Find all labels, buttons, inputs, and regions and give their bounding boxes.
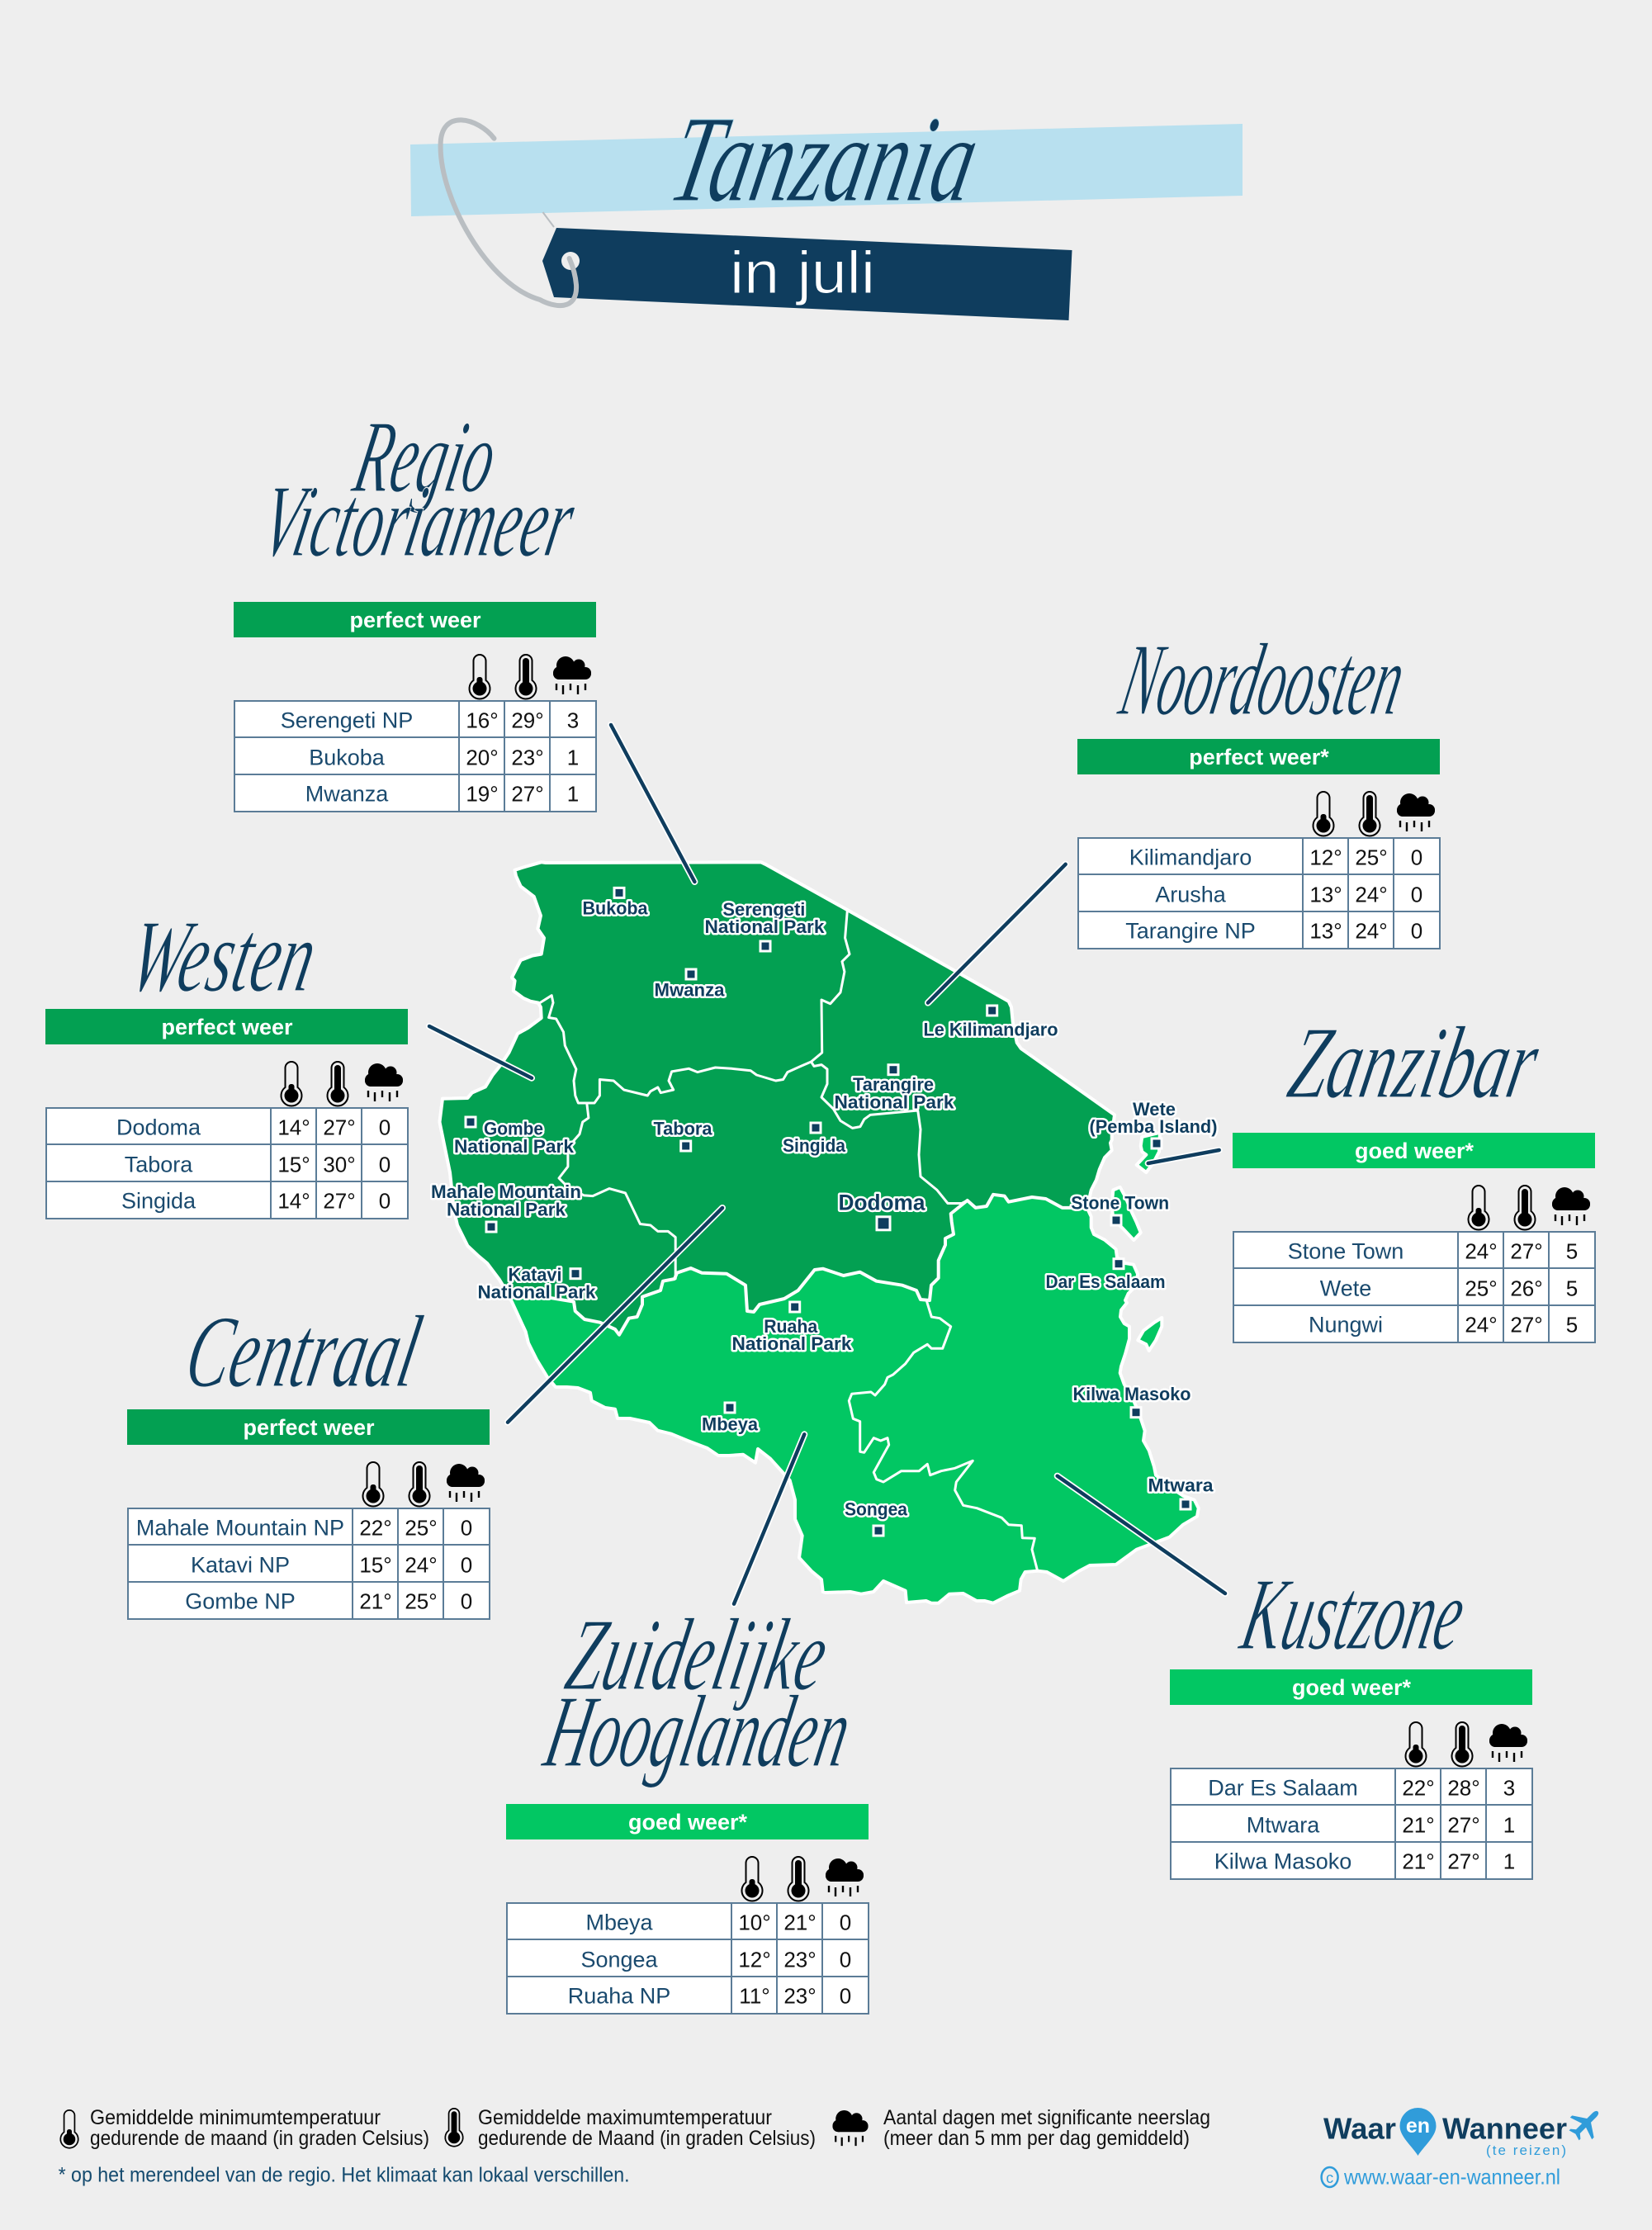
- table values: Singida: [121, 1189, 196, 1214]
- table values: 0: [461, 1589, 472, 1614]
- table values: Mahale Mountain NP: [136, 1516, 344, 1541]
- table values: 27°: [323, 1189, 356, 1214]
- table values: 24°: [1355, 883, 1388, 907]
- table values: 27°: [1447, 1813, 1480, 1838]
- place: Mahale Mountain National Park: Mahale Mountain: [431, 1181, 581, 1202]
- table values: 21°: [359, 1589, 392, 1614]
- place: Mwanza: Mwanza: [654, 979, 725, 1000]
- heading: Zuidelijke Hooglanden: [535, 1598, 861, 1789]
- table values: Stone Town: [1288, 1239, 1403, 1264]
- pointer lines from regions to panels: [429, 725, 1225, 1604]
- heading: Regio Victoriameer: [253, 400, 585, 579]
- subtitle: in juli: in juli: [730, 240, 875, 306]
- place: Ruaha National Park: National Park: [731, 1333, 852, 1354]
- heading: Regio Victoriameer: Regio: [345, 400, 507, 514]
- column icons: [1468, 1186, 1590, 1230]
- pointer: Regio Victoriameer: [611, 725, 694, 882]
- island: Zanzibar: [1112, 1187, 1141, 1240]
- place: Katavi National Park: Katavi: [509, 1265, 561, 1285]
- table values: 13°: [1309, 919, 1342, 944]
- table values: [568, 1910, 851, 2009]
- table values: Gombe NP: [185, 1589, 296, 1614]
- table values: Dar Es Salaam: [1208, 1776, 1358, 1801]
- table values: 12°: [738, 1948, 771, 1972]
- table values: 0: [840, 1948, 851, 1972]
- logo pin: [1400, 2108, 1437, 2156]
- table values: 28°: [1447, 1776, 1480, 1801]
- place: Gombe National Park: National Park: [454, 1136, 575, 1157]
- mainland: northern and central regions: [439, 862, 1115, 1335]
- rating banner: goed weer*: [1292, 1675, 1412, 1700]
- place: Bukoba: [583, 888, 648, 918]
- table values: 21°: [1402, 1849, 1435, 1874]
- place: Serengeti National Park: National Park: [705, 916, 825, 937]
- place: Stone Town: [1071, 1193, 1169, 1225]
- table grid: [1078, 838, 1440, 949]
- table values: 0: [379, 1153, 391, 1177]
- pointer: Centraal: [508, 1208, 722, 1423]
- place: Tarangire National Park: National Park: [834, 1091, 954, 1113]
- island: Pemba: [1137, 1133, 1160, 1172]
- column icons: [741, 1857, 864, 1901]
- table values: 21°: [1402, 1813, 1435, 1838]
- table values: 0: [461, 1516, 472, 1541]
- table values: 16°: [466, 708, 499, 733]
- rating banner: [1077, 739, 1440, 774]
- place: Stone Town: Stone Town: [1071, 1193, 1169, 1214]
- place: Tarangire National Park: [834, 1065, 954, 1113]
- rating banner: perfect weer: [161, 1015, 293, 1039]
- table values: Wete: [1320, 1276, 1371, 1301]
- table values: 24°: [1355, 919, 1388, 944]
- table values: 5: [1566, 1239, 1578, 1264]
- table values: 13°: [1309, 883, 1342, 907]
- place: Mwanza: [654, 969, 725, 1000]
- weather table: Regio Victoriameer: [234, 602, 596, 812]
- legend text: rain days: Aantal dagen met significante neerslag: [883, 2106, 1210, 2129]
- pointer: Kustzone: [1058, 1476, 1225, 1593]
- table values: 25°: [1465, 1276, 1498, 1301]
- table values: 27°: [1510, 1239, 1543, 1264]
- table values: Mwanza: [305, 782, 389, 807]
- legend icon: minimum temperature: [60, 2110, 78, 2148]
- table values: Serengeti NP: [281, 708, 413, 733]
- pointer: Westen: [429, 1026, 532, 1078]
- pointer: Zuidelijke Hooglanden: [734, 1434, 804, 1604]
- legend text: rain days: (meer dan 5 mm per dag gemiddeld): [883, 2127, 1190, 2150]
- place: Ruaha National Park: Ruaha: [764, 1316, 818, 1337]
- table values: 12°: [1309, 845, 1342, 870]
- place: Kilwa Masoko: [1073, 1384, 1190, 1418]
- rating banner: perfect weer: [243, 1415, 375, 1440]
- table values: 0: [461, 1553, 472, 1578]
- table values: 27°: [1447, 1849, 1480, 1874]
- logo wordmark: Waar: Waar: [1323, 2112, 1396, 2146]
- table values: Mbeya: [585, 1910, 654, 1935]
- table values: 1: [1503, 1813, 1515, 1838]
- table values: 5: [1566, 1276, 1578, 1301]
- table values: Dodoma: [116, 1115, 201, 1140]
- island: Mafia: [1138, 1318, 1162, 1351]
- legend icon: maximum temperature: [445, 2109, 463, 2147]
- table values: 24°: [1465, 1239, 1498, 1264]
- pointer: Zanzibar: [1148, 1150, 1219, 1163]
- table values: 1: [1503, 1849, 1515, 1874]
- table grid: [46, 1108, 408, 1219]
- table values: 24°: [1465, 1313, 1498, 1338]
- table values: Kilimandjaro: [1129, 845, 1252, 870]
- place: Songea: [845, 1499, 908, 1536]
- logo tagline: (te reizen): [1486, 2142, 1566, 2158]
- place: Tarangire National Park: Tarangire: [853, 1074, 934, 1095]
- panel: Centraal: [127, 1295, 490, 1619]
- table values: 29°: [511, 708, 544, 733]
- title: Tanzania: Tanzania: [660, 90, 990, 228]
- table values: 27°: [1510, 1313, 1543, 1338]
- table values: 30°: [323, 1153, 356, 1177]
- website with copyright: www.waar-en-wanneer.nl: [1343, 2165, 1560, 2190]
- weather table: Kustzone: [1170, 1669, 1532, 1879]
- icon: airplane: [1563, 2100, 1609, 2147]
- table values: 23°: [783, 1984, 817, 2009]
- table values: 23°: [783, 1948, 817, 1972]
- pointer: Noordoosten: [928, 864, 1066, 1003]
- place: Dodoma: Dodoma: [839, 1191, 925, 1215]
- title block: [410, 90, 1243, 320]
- map of Tanzania: [439, 862, 1199, 1603]
- panel: Zanzibar: [1233, 1006, 1595, 1342]
- rating banner: [1170, 1669, 1532, 1705]
- weather table: Zanzibar: [1233, 1133, 1595, 1342]
- place: Mbeya: [702, 1403, 759, 1435]
- legend icon: rain days: [832, 2110, 869, 2146]
- table values: [116, 1115, 391, 1214]
- table values: [1125, 845, 1422, 944]
- place: Dar Es Salaam: [1045, 1259, 1166, 1292]
- panel: Regio Victoriameer: [234, 400, 596, 812]
- legend text: rain days: [883, 2106, 1210, 2150]
- place: Dar Es Salaam: Dar Es Salaam: [1045, 1271, 1166, 1292]
- heading: Zuidelijke Hooglanden: Zuidelijke: [557, 1598, 838, 1712]
- panel: Kustzone: [1170, 1557, 1532, 1879]
- table values: 20°: [466, 746, 499, 770]
- table values: 3: [567, 708, 579, 733]
- place: Singida: Singida: [783, 1135, 846, 1156]
- rating banner: goed weer*: [1355, 1139, 1474, 1163]
- table values: 23°: [511, 746, 544, 770]
- place: Mahale Mountain National Park: [431, 1181, 581, 1232]
- rating banner: [506, 1804, 869, 1839]
- table values: 0: [1411, 883, 1422, 907]
- place: Songea: Songea: [845, 1499, 908, 1520]
- rating banner: perfect weer*: [1189, 745, 1329, 769]
- table values: 0: [379, 1115, 391, 1140]
- place: Wete (Pemba Island): Wete: [1133, 1099, 1176, 1120]
- subtitle tag: [542, 228, 1072, 320]
- legend text: minimum temperature: [90, 2106, 429, 2150]
- legend text: maximum temperature: Gemiddelde maximumtemperatuur: [478, 2106, 772, 2129]
- place: Mtwara: [1148, 1475, 1214, 1509]
- column icons: [1405, 1722, 1527, 1767]
- tag string (thin): [543, 212, 554, 227]
- table values: Bukoba: [309, 746, 386, 770]
- heading: Zuidelijke Hooglanden: Hooglanden: [535, 1674, 861, 1789]
- rating banner: [1233, 1133, 1595, 1168]
- logo pin: en: [1406, 2114, 1430, 2138]
- place: Serengeti National Park: [705, 899, 825, 951]
- place: Kilwa Masoko: Kilwa Masoko: [1073, 1384, 1190, 1404]
- tag string: [441, 120, 576, 305]
- weather table: Zuidelijke Hooglanden: [506, 1804, 869, 2014]
- place: Gombe National Park: Gombe: [484, 1119, 543, 1139]
- place: Dodoma: [839, 1191, 925, 1230]
- heading: Noordoosten: Noordoosten: [1111, 623, 1415, 737]
- table values: 26°: [1510, 1276, 1543, 1301]
- place: Wete (Pemba Island): [1090, 1099, 1217, 1148]
- weather table: Westen: [45, 1009, 408, 1219]
- table values: 21°: [783, 1910, 817, 1935]
- table values: 15°: [277, 1153, 310, 1177]
- weather table: Noordoosten: [1077, 739, 1440, 949]
- table values: [1288, 1239, 1578, 1338]
- rating banner: [234, 602, 596, 637]
- table values: 0: [840, 1984, 851, 2009]
- place: Bukoba: Bukoba: [583, 898, 648, 918]
- table grid: [234, 701, 596, 812]
- table grid: [1171, 1768, 1532, 1879]
- column icons: [281, 1062, 403, 1106]
- table values: 11°: [739, 1984, 770, 2009]
- footnote: * op het merendeel van de regio. Het klimaat kan lokaal verschillen.: [59, 2164, 630, 2187]
- table values: 22°: [1402, 1776, 1435, 1801]
- mainland: southern regions: [439, 862, 1199, 1603]
- table values: 1: [567, 782, 579, 807]
- table values: Tarangire NP: [1125, 919, 1256, 944]
- place: Serengeti National Park: Serengeti: [722, 899, 805, 920]
- website with copyright: c: [1326, 2170, 1333, 2186]
- table values: Nungwi: [1309, 1313, 1383, 1338]
- table values: 14°: [277, 1189, 310, 1214]
- table values: [1208, 1776, 1515, 1874]
- place: Mbeya: Mbeya: [702, 1414, 759, 1435]
- column icons: [1313, 792, 1435, 836]
- column icons: [363, 1462, 485, 1506]
- column icons: [469, 655, 591, 698]
- title band: [410, 124, 1243, 216]
- legend text: minimum temperature: Gemiddelde minimumtemperatuur: [90, 2106, 381, 2129]
- table values: 27°: [323, 1115, 356, 1140]
- rating banner: perfect weer: [349, 608, 481, 632]
- place: Tabora: [654, 1119, 712, 1151]
- heading: Regio Victoriameer: Victoriameer: [253, 464, 585, 579]
- table values: 10°: [738, 1910, 771, 1935]
- panel: Zuidelijke Hooglanden: [506, 1598, 869, 2014]
- heading: Centraal: Centraal: [177, 1295, 431, 1409]
- rating banner: goed weer*: [628, 1810, 748, 1835]
- table values: Songea: [580, 1948, 659, 1972]
- internal region borders: [540, 910, 1038, 1571]
- table values: 25°: [405, 1516, 438, 1541]
- legend: [59, 2106, 1210, 2187]
- place: Le Kilimandjaro: [923, 1006, 1058, 1040]
- table grid: [507, 1903, 869, 2014]
- table values: Ruaha NP: [568, 1984, 670, 2009]
- table values: 0: [1411, 845, 1422, 870]
- panel: Westen: [45, 899, 408, 1219]
- place: Mtwara: Mtwara: [1148, 1475, 1214, 1496]
- place: Katavi National Park: National Park: [477, 1282, 596, 1303]
- table values: 14°: [277, 1115, 310, 1140]
- place: Tabora: Tabora: [654, 1119, 712, 1139]
- table values: Mtwara: [1247, 1813, 1320, 1838]
- table values: 0: [1411, 919, 1422, 944]
- place: Mahale Mountain National Park: National Park: [447, 1199, 566, 1220]
- table values: Arusha: [1155, 883, 1227, 907]
- weather table: Centraal: [127, 1409, 490, 1619]
- place: Gombe National Park: [454, 1117, 575, 1157]
- table values: [281, 708, 579, 807]
- map place labels: [431, 888, 1217, 1536]
- place: Wete (Pemba Island): (Pemba Island): [1090, 1116, 1217, 1137]
- table values: Tabora: [125, 1153, 193, 1177]
- table values: [136, 1516, 472, 1614]
- place: Katavi National Park: [477, 1265, 596, 1303]
- logo wordmark: Wanneer: Wanneer: [1442, 2112, 1567, 2146]
- table values: 25°: [405, 1589, 438, 1614]
- heading: Kustzone: Kustzone: [1232, 1557, 1475, 1672]
- table values: 1: [567, 746, 579, 770]
- table values: 0: [840, 1910, 851, 1935]
- tag hole: [561, 252, 580, 270]
- table grid: [1233, 1232, 1595, 1342]
- place: Ruaha National Park: [731, 1302, 852, 1354]
- table values: 0: [379, 1189, 391, 1214]
- table values: 25°: [1355, 845, 1388, 870]
- table values: 15°: [359, 1553, 392, 1578]
- logo: Waar en Wanneer: [1322, 2100, 1609, 2190]
- panel: Noordoosten: [1077, 623, 1440, 949]
- legend text: maximum temperature: [478, 2106, 816, 2150]
- rating banner: [45, 1009, 408, 1044]
- place: Le Kilimandjaro: Le Kilimandjaro: [923, 1020, 1058, 1040]
- legend text: maximum temperature: gedurende de Maand (in graden Celsius): [478, 2127, 816, 2150]
- table values: Katavi NP: [191, 1553, 290, 1578]
- legend text: minimum temperature: gedurende de maand (in graden Celsius): [90, 2127, 429, 2150]
- place: Singida: [783, 1123, 846, 1156]
- table values: 27°: [511, 782, 544, 807]
- table values: 19°: [466, 782, 499, 807]
- heading: Westen: Westen: [121, 899, 327, 1014]
- table values: Kilwa Masoko: [1214, 1849, 1351, 1874]
- table values: 24°: [405, 1553, 438, 1578]
- table values: 3: [1503, 1776, 1515, 1801]
- table grid: [128, 1508, 490, 1619]
- table values: 22°: [359, 1516, 392, 1541]
- table values: 5: [1566, 1313, 1578, 1338]
- rating banner: [127, 1409, 490, 1445]
